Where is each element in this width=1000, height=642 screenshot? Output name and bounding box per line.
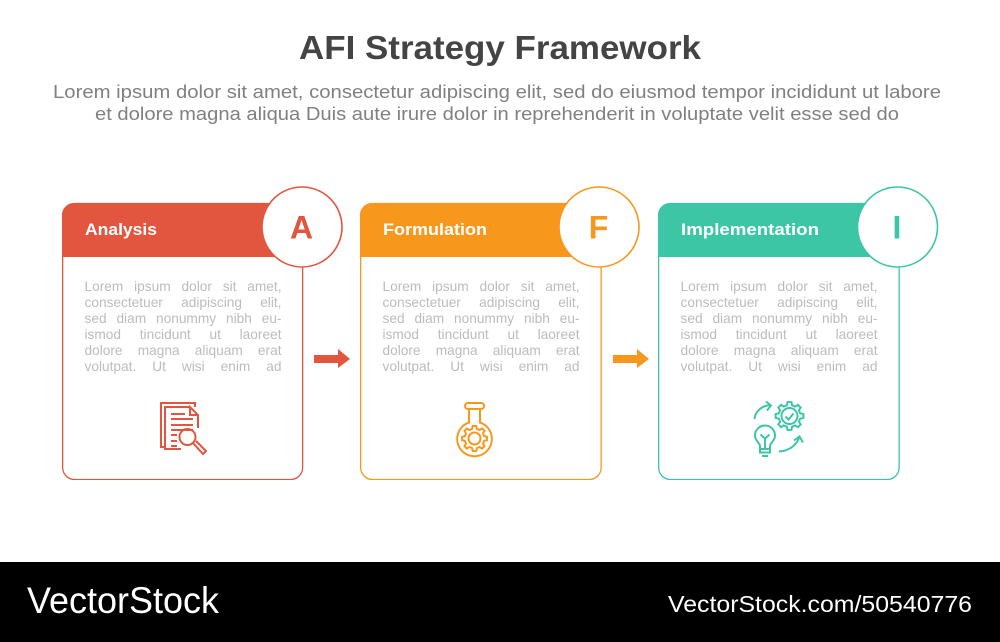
badge: F [559, 187, 639, 267]
text: Implementation description [680, 278, 878, 374]
card outline and header [658, 203, 899, 480]
icon: document with magnifier [160, 402, 208, 456]
badge: I [858, 187, 938, 267]
footer bar [0, 562, 1000, 642]
text: Formulation description: ismod tincidunt ut laoreet [382, 326, 580, 342]
title: AFI Strategy Framework [299, 29, 702, 66]
arrow: Formulation to Implementation [613, 349, 649, 368]
image url: VectorStock.com/50540776 [668, 591, 972, 617]
text: Analysis description: sed diam nonummy nibh eu- [84, 310, 282, 326]
badge: A [262, 187, 342, 267]
icon: flask with gear [456, 402, 493, 458]
text: Implementation description: sed diam nonummy nibh eu- [680, 310, 878, 326]
text: Implementation description: Lorem ipsum dolor sit amet, [680, 278, 878, 294]
card outline and header [360, 203, 601, 480]
badge: I: I [893, 210, 901, 246]
heading: Formulation: Formulation [383, 220, 487, 239]
icon: light bulb, gear and cycle arrows [754, 400, 804, 457]
text: Formulation description: sed diam nonummy nibh eu- [382, 310, 580, 326]
text: Analysis description: volutpat. Ut wisi enim ad [84, 358, 282, 374]
text: Formulation description: Lorem ipsum dolor sit amet, [382, 278, 580, 294]
heading: Analysis: Analysis [85, 220, 157, 239]
text: Analysis description [84, 278, 282, 374]
text: Analysis description: consectetuer adipiscing elit, [84, 294, 282, 310]
text: Formulation description [382, 278, 580, 374]
text: Formulation description: consectetuer adipiscing elit, [382, 294, 580, 310]
card outline and header [62, 203, 303, 480]
text: Implementation description: volutpat. Ut wisi enim ad [680, 358, 878, 374]
arrow: Analysis to Formulation [314, 349, 350, 368]
text: Formulation description: dolore magna aliquam erat [382, 342, 580, 358]
text: Formulation description: volutpat. Ut wisi enim ad [382, 358, 580, 374]
text: Analysis description: Lorem ipsum dolor sit amet, [84, 278, 282, 294]
badge: A: A [290, 210, 313, 246]
text: Analysis description: ismod tincidunt ut laoreet [84, 326, 282, 342]
heading: Implementation: Implementation [681, 220, 819, 239]
text: Implementation description: consectetuer adipiscing elit, [680, 294, 878, 310]
text: Implementation description: dolore magna aliquam erat [680, 342, 878, 358]
subtitle text: et dolore magna aliqua Duis aute irure dolor in reprehenderit in voluptate velit esse sed do [95, 103, 899, 124]
panel: Implementation [658, 186, 938, 480]
text: Implementation description: ismod tincidunt ut laoreet [680, 326, 878, 342]
panel: Formulation [360, 186, 640, 480]
text: Analysis description: dolore magna aliquam erat [84, 342, 282, 358]
panel: Analysis [62, 186, 343, 480]
subtitle text: Lorem ipsum dolor sit amet, consectetur adipiscing elit, sed do eiusmod tempor incididunt ut labore [53, 81, 941, 102]
subtitle text [53, 81, 941, 124]
logo: VectorStock: VectorStock [27, 580, 219, 621]
badge: F: F [589, 210, 608, 246]
